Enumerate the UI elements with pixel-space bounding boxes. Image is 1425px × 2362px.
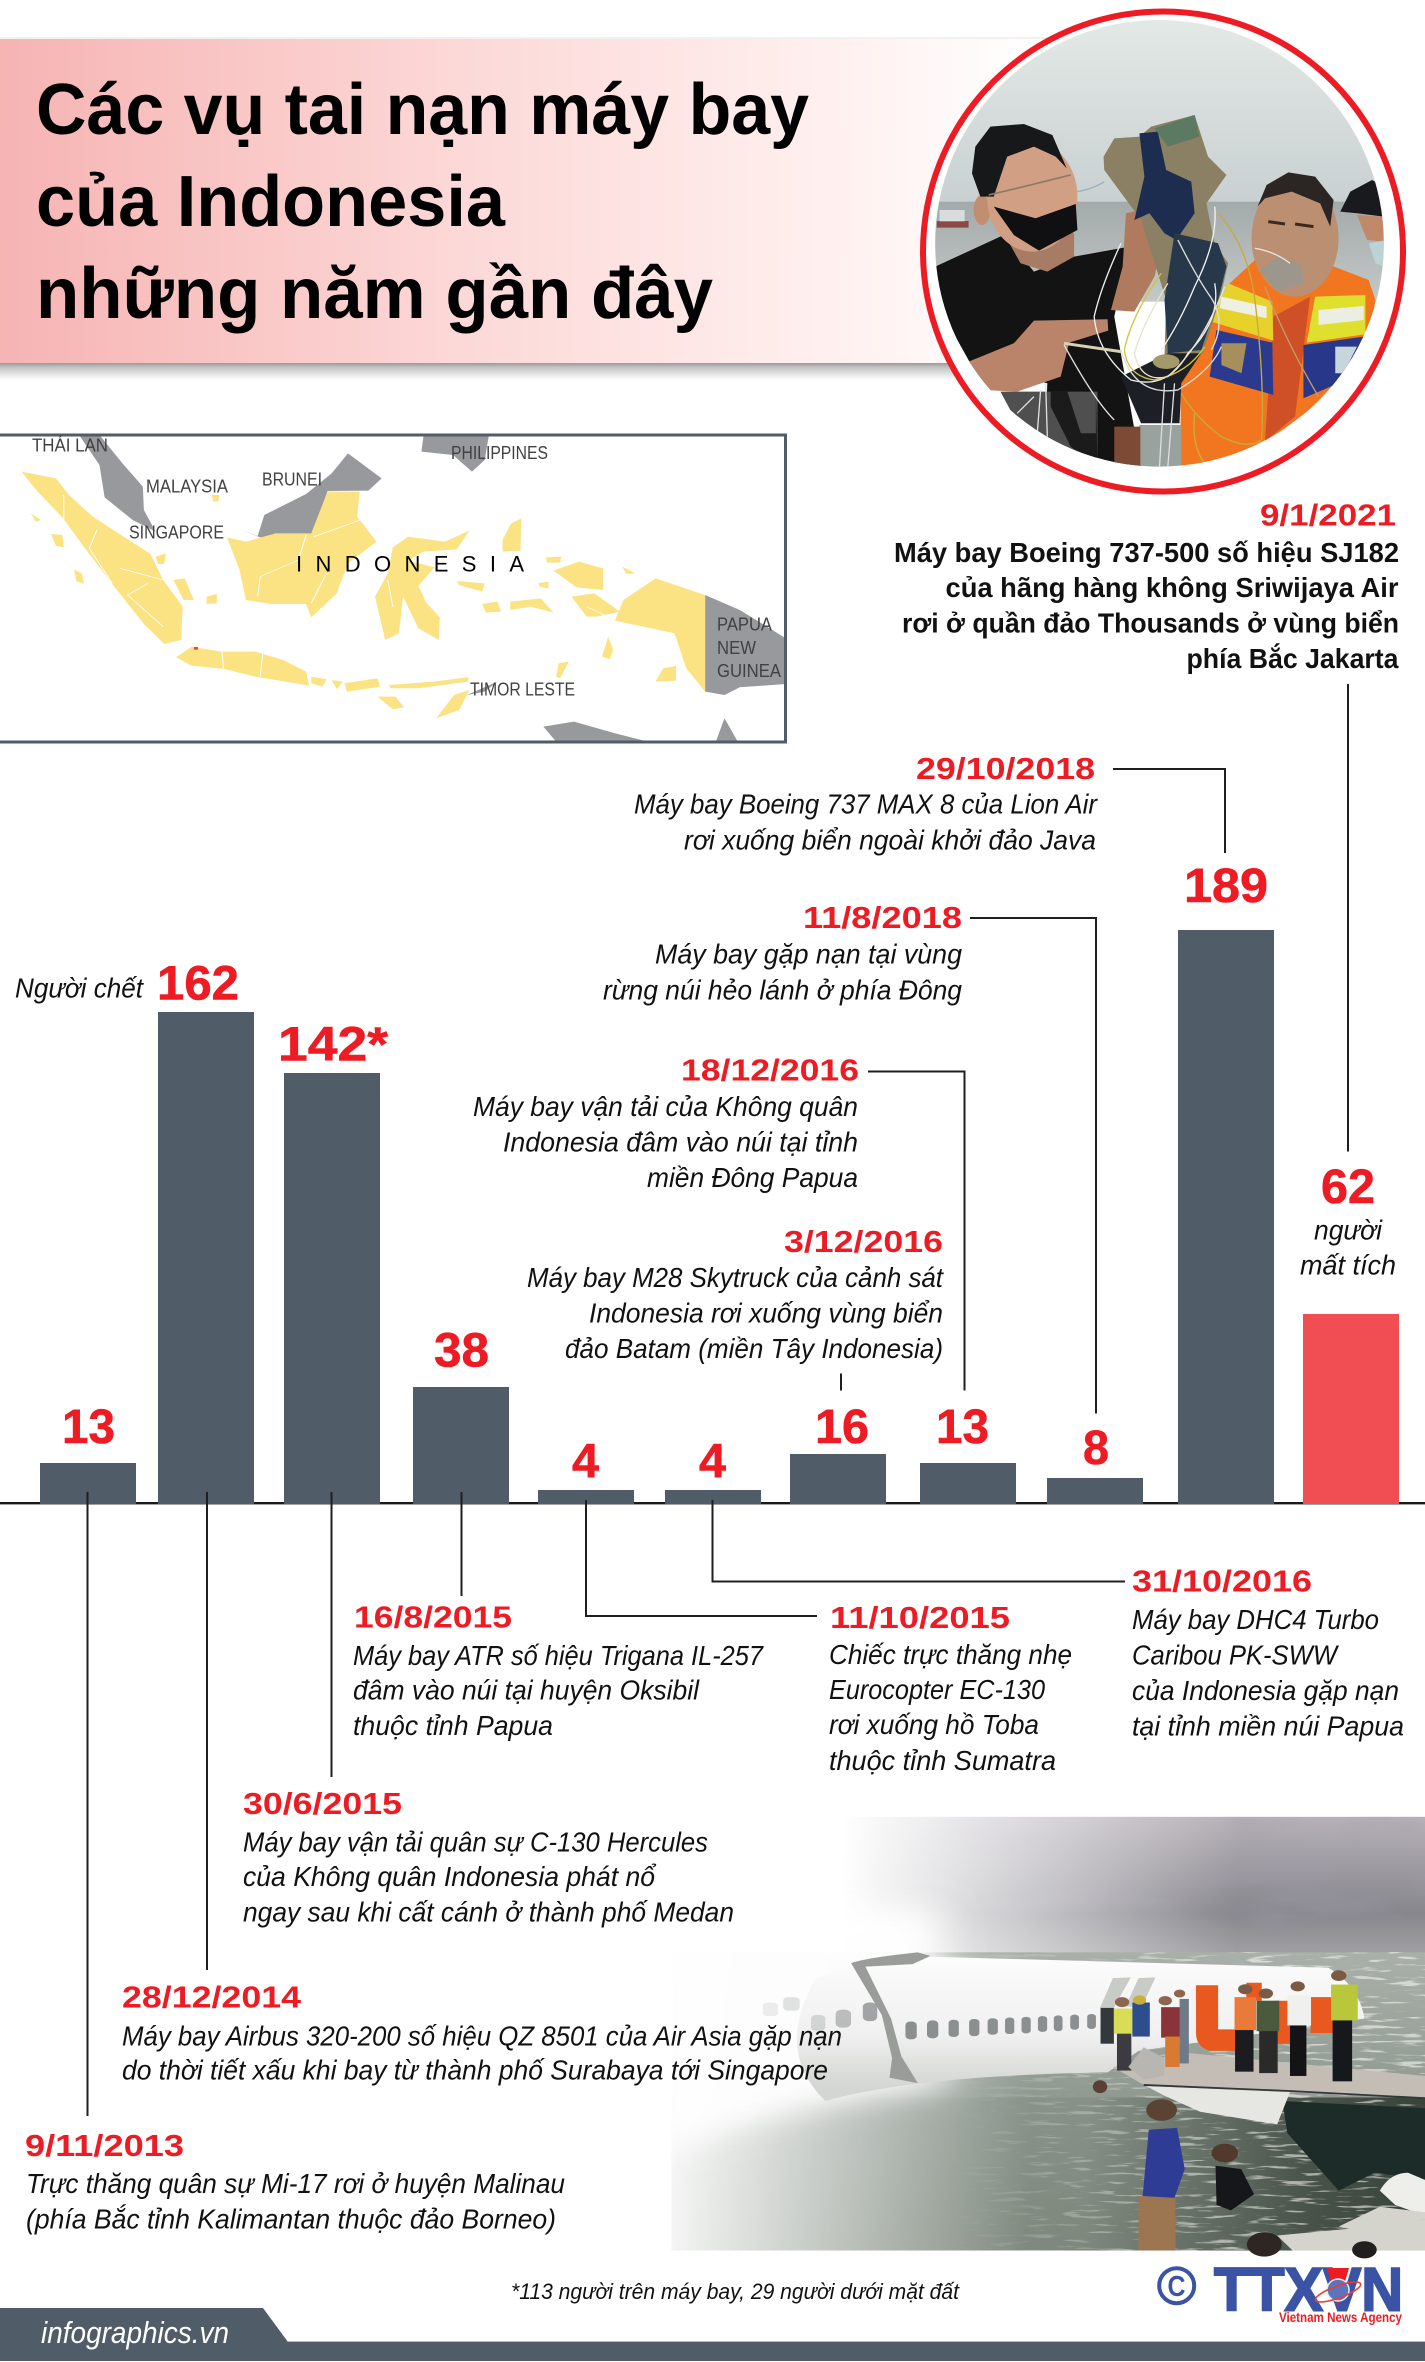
map labels: SINGAPORE <box>129 523 224 543</box>
event: 9/1/2021 <box>894 498 1399 674</box>
event: 18/12/2016 <box>473 1052 859 1193</box>
event: 31/10/2016: tại tỉnh miền núi Papua <box>1132 1710 1404 1742</box>
water under the wing <box>1282 2101 1425 2191</box>
event: 11/10/2015 <box>829 1600 1072 1776</box>
event: 31/10/2016: của Indonesia gặp nạn <box>1132 1675 1399 1706</box>
globe and orbit <box>1313 2278 1363 2306</box>
footnote: *113 người trên máy bay, 29 người dưới mặt đất <box>511 2279 960 2304</box>
map of Indonesia <box>0 435 786 742</box>
map labels: THÁI LAN <box>32 436 108 456</box>
event: 11/10/2015: rơi xuống hồ Toba <box>829 1709 1039 1740</box>
event: 16/8/2015 <box>353 1600 765 1741</box>
event: 11/10/2015: Eurocopter EC-130 <box>829 1674 1046 1705</box>
event: 31/10/2016: 31/10/2016 <box>1132 1564 1312 1598</box>
event: 18/12/2016: 18/12/2016 <box>681 1052 859 1088</box>
title banner <box>0 37 1050 380</box>
fuselage <box>763 1952 1364 2101</box>
map labels: INDONESIA <box>296 552 524 577</box>
Lion Air livery <box>1196 1983 1335 2051</box>
event: 9/1/2021: phía Bắc Jakarta <box>1186 643 1399 674</box>
event: 30/6/2015: ngay sau khi cất cánh ở thành phố Medan <box>243 1897 734 1928</box>
event: 16/8/2015: thuộc tỉnh Papua <box>353 1710 553 1741</box>
bar values: 38 <box>434 1325 489 1378</box>
event: 28/12/2014: do thời tiết xấu khi bay từ thành phố Surabaya tới Singapore <box>122 2055 828 2086</box>
event: 3/12/2016: Máy bay M28 Skytruck của cảnh sát <box>527 1262 944 1293</box>
bar values: 142* <box>278 1018 388 1072</box>
bars <box>40 930 1274 1504</box>
province borders <box>64 495 615 677</box>
Indonesian islands in yellow <box>21 472 705 718</box>
left man <box>935 235 1141 467</box>
event: 3/12/2016: 3/12/2016 <box>784 1224 943 1259</box>
event: 29/10/2018: rơi xuống biển ngoài khởi đảo Java <box>684 825 1096 856</box>
event: 3/12/2016 <box>527 1224 944 1364</box>
event: 31/10/2016: Máy bay DHC4 Turbo <box>1132 1604 1379 1635</box>
map labels: MALAYSIA <box>146 477 228 497</box>
people on the wing <box>1114 1970 1358 2081</box>
person swimming <box>1093 2080 1107 2093</box>
bar values: 4 <box>572 1436 599 1489</box>
heading: những năm gần đây <box>36 254 713 334</box>
event: 18/12/2016: miền Đông Papua <box>647 1162 858 1193</box>
copyright mark <box>1159 2268 1194 2303</box>
map labels: PAPUA <box>717 615 772 635</box>
unit label: deaths: Người chết <box>15 972 144 1004</box>
event: 11/8/2018: rừng núi hẻo lánh ở phía Đông <box>603 974 963 1005</box>
wordmark: TTXVN <box>1214 2256 1403 2324</box>
event: 3/12/2016: Indonesia rơi xuống vùng biển <box>589 1298 943 1329</box>
marker <box>194 647 198 650</box>
website: infographics.vn <box>41 2315 229 2350</box>
wing <box>1113 2053 1425 2098</box>
event: 18/12/2016: Máy bay vận tải của Không quân <box>473 1091 858 1122</box>
copyright mark: C <box>1168 2271 1186 2303</box>
event: 9/11/2013: (phía Bắc tỉnh Kalimantan thuộc đảo Borneo) <box>26 2204 556 2234</box>
bar values: 162 <box>157 958 239 1010</box>
foreground men in water <box>1139 2099 1254 2251</box>
footer band <box>0 2308 1425 2361</box>
event: 11/10/2015: Chiếc trực thăng nhẹ <box>829 1639 1072 1670</box>
bar values: 62 <box>1321 1161 1375 1214</box>
event: 9/11/2013: 9/11/2013 <box>25 2128 184 2163</box>
bar values: 8 <box>1083 1422 1109 1475</box>
event: 11/8/2018 <box>603 900 963 1005</box>
doors <box>1100 1977 1155 2008</box>
wires <box>1017 182 1318 467</box>
unit label: missing: mất tích <box>1300 1250 1396 1281</box>
unit label: missing <box>1300 1214 1396 1281</box>
event: 16/8/2015: đâm vào núi tại huyện Oksibil <box>353 1675 700 1706</box>
map labels: BRUNEI <box>262 470 322 490</box>
event: 9/1/2021: Máy bay Boeing 737-500 số hiệu SJ182 <box>894 537 1399 568</box>
right man <box>1181 260 1375 467</box>
event: 28/12/2014 <box>122 1980 842 2086</box>
bar values: 189 <box>1184 860 1268 913</box>
missing-people bar <box>1303 1314 1399 1504</box>
neighbouring countries in grey <box>79 435 786 742</box>
crash scene photo: plane in the sea <box>651 1817 1425 2258</box>
event: 16/8/2015: Máy bay ATR số hiệu Trigana IL-257 <box>353 1640 765 1671</box>
event: 3/12/2016: đảo Batam (miền Tây Indonesia) <box>565 1333 943 1364</box>
map labels: TIMOR LESTE <box>470 680 575 700</box>
map labels: GUINEA <box>717 661 781 681</box>
event: 30/6/2015 <box>243 1786 734 1928</box>
event: 29/10/2018: 29/10/2018 <box>916 751 1095 786</box>
event: 18/12/2016: Indonesia đâm vào núi tại tỉnh <box>503 1127 858 1158</box>
event: 29/10/2018 <box>634 751 1099 856</box>
event: 11/8/2018: Máy bay gặp nạn tại vùng <box>655 939 963 970</box>
event: 30/6/2015: Máy bay vận tải quân sự C-130 Hercules <box>243 1826 708 1857</box>
event: 9/1/2021: rơi ở quần đảo Thousands ở vùng biển <box>902 608 1399 639</box>
event: 11/8/2018: 11/8/2018 <box>803 900 962 935</box>
logo: TTXVN <box>1159 2256 1403 2325</box>
unit label: missing: người <box>1314 1214 1383 1245</box>
bar values: 13 <box>936 1401 989 1454</box>
event: 9/11/2013: Trực thăng quân sự Mi-17 rơi ở huyện Malinau <box>26 2168 565 2199</box>
wreckage <box>1104 115 1228 357</box>
bar values <box>62 860 1375 1489</box>
event: 11/10/2015: thuộc tỉnh Sumatra <box>829 1745 1056 1776</box>
heading <box>36 70 809 334</box>
map labels: NEW <box>717 638 756 658</box>
event: 31/10/2016 <box>1132 1564 1404 1742</box>
event: 30/6/2015: của Không quân Indonesia phát nổ <box>243 1861 657 1892</box>
logo: TTXVN: Vietnam News Agency <box>1279 2309 1402 2325</box>
bar values: 13 <box>62 1401 115 1454</box>
event: 28/12/2014: Máy bay Airbus 320-200 số hiệu QZ 8501 của Air Asia gặp nạn <box>122 2020 842 2051</box>
event: 11/10/2015: 11/10/2015 <box>830 1600 1010 1635</box>
event: 29/10/2018: Máy bay Boeing 737 MAX 8 của Lion Air <box>634 788 1099 819</box>
map labels: PHILIPPINES <box>451 443 548 463</box>
bar chart <box>0 860 1425 1504</box>
axis <box>0 1502 1425 1504</box>
heading: của Indonesia <box>36 162 506 242</box>
event: 16/8/2015: 16/8/2015 <box>354 1600 512 1634</box>
soft white fade over the left of the sea <box>651 1908 949 2158</box>
event: 9/11/2013 <box>25 2128 565 2234</box>
event: 9/1/2021: của hãng hàng không Sriwijaya Air <box>946 572 1399 603</box>
map frame <box>0 435 786 742</box>
bar values: 16 <box>815 1401 869 1454</box>
event: 31/10/2016: Caribou PK-SWW <box>1132 1640 1340 1670</box>
circular photo: men holding wreckage <box>923 12 1403 492</box>
map labels <box>32 436 781 700</box>
life raft <box>1277 2173 1425 2251</box>
event: 9/1/2021: 9/1/2021 <box>1260 498 1396 533</box>
event: 30/6/2015: 30/6/2015 <box>243 1786 402 1821</box>
heading: Các vụ tai nạn máy bay <box>36 70 809 150</box>
leader lines <box>88 684 1348 2116</box>
bar values: 4 <box>699 1436 726 1489</box>
event: 28/12/2014: 28/12/2014 <box>122 1980 302 2014</box>
